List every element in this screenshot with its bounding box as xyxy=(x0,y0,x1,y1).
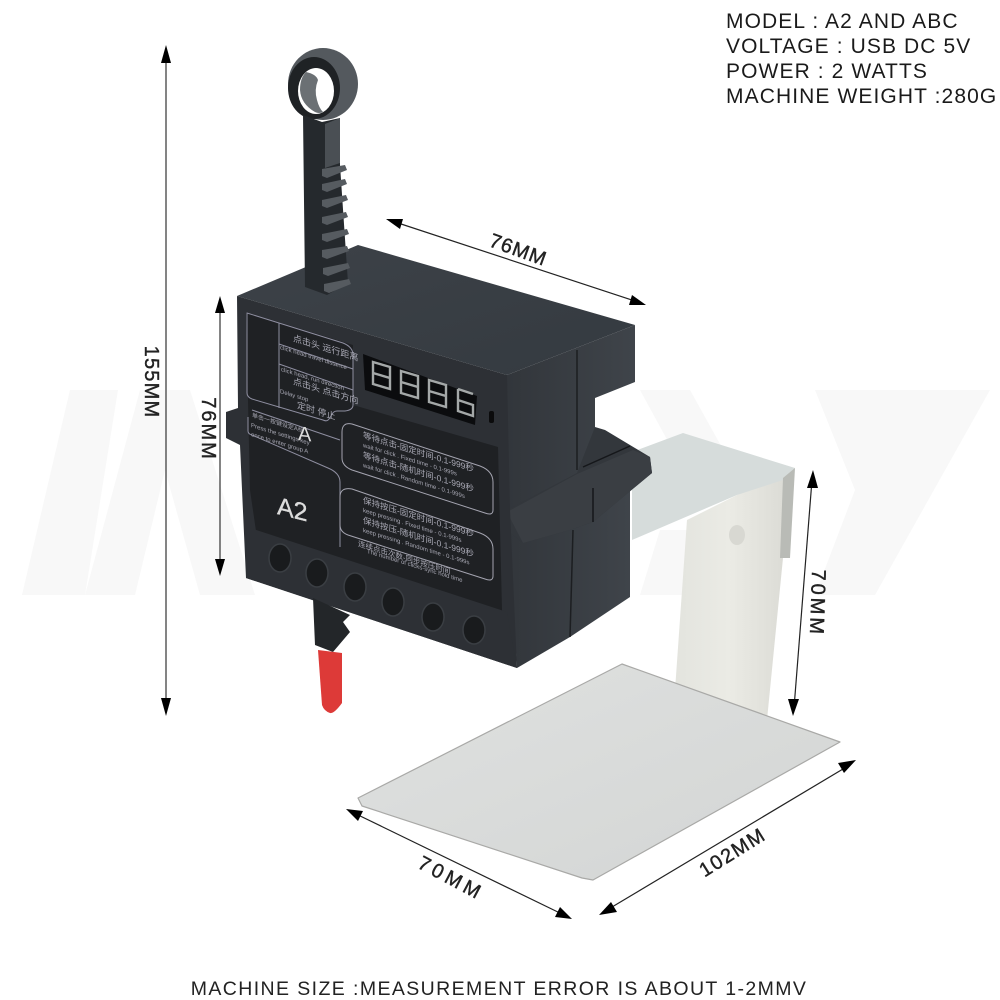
footer note: MACHINE SIZE :MEASUREMENT ERROR IS ABOUT 1-2MMV xyxy=(191,978,807,1000)
label: keep pressing panel: 保持按压-随机时间-0.1-999秒 xyxy=(363,514,474,559)
plunger: lower rack and red tip xyxy=(313,598,350,713)
label: letter A: A xyxy=(298,423,312,446)
device body: 定时 停止 xyxy=(297,399,335,422)
device body: 单击一按键设定A组 xyxy=(252,411,304,435)
dimension: upright height 70MM xyxy=(788,470,829,716)
device body: Press the settings key xyxy=(251,422,310,447)
device top face xyxy=(237,245,635,375)
dimension: width 76MM xyxy=(386,219,646,305)
device body: once to enter group A xyxy=(251,431,309,456)
label: wait for click panel: 等待点击-固定时间-0.1-999秒 xyxy=(363,429,474,474)
rod xyxy=(303,115,348,295)
device front face xyxy=(226,296,517,668)
dimension: front height 76MM xyxy=(197,296,225,576)
label: wait for click panel: wait for click . Random time - 0.1-999s xyxy=(362,462,465,500)
device side clamp xyxy=(507,427,652,543)
stand: bracket top and upright xyxy=(632,433,795,720)
device body: Delay stop xyxy=(280,388,309,404)
device body: click head travel distance xyxy=(280,344,347,372)
dimension: width 76MM: 76MM xyxy=(486,230,550,271)
device upper side face xyxy=(507,325,635,530)
label: wait for click panel: wait for click . Fixed time - 0.1-999s xyxy=(362,442,457,478)
plunger: rack rod with ring handle xyxy=(288,48,358,295)
display window xyxy=(363,354,494,425)
dimension: plate depth 70MM xyxy=(346,809,572,919)
device lower side face xyxy=(507,480,630,668)
specification text block: MACHINE WEIGHT :280G xyxy=(726,85,997,108)
device body: 点击头 点击方向 xyxy=(293,375,358,406)
label: keep pressing panel: 连续点击次数-同步按压时间 xyxy=(358,538,450,576)
label: wait for click panel xyxy=(342,424,493,514)
specification text block: VOLTAGE : USB DC 5V xyxy=(726,35,971,58)
label: keep pressing panel: keep pressing . Fixed time - 0.1-999s xyxy=(363,507,462,544)
device body: click head, run direction xyxy=(281,366,344,392)
rack teeth xyxy=(322,165,351,293)
specification text block: MODEL : A2 AND ABC xyxy=(726,10,959,33)
label: keep pressing panel xyxy=(340,489,493,584)
dimension: plate depth 70MM: 70MM xyxy=(414,852,488,905)
stand: base plate xyxy=(358,664,840,880)
device body xyxy=(226,245,652,668)
label: keep pressing panel: 保持按压-固定时间-0.1-999秒 xyxy=(363,494,474,539)
dimension: plate width 102MM xyxy=(599,760,856,915)
dimension: upright height 70MM: 70MM xyxy=(805,569,829,637)
dimension: front height 76MM: 76MM xyxy=(197,397,219,461)
background watermark logo xyxy=(22,390,990,595)
dimension: total height 155MM xyxy=(140,45,171,716)
label: keep pressing panel: keep pressing . Random time - 0.1-999s xyxy=(363,527,469,567)
label: upper instructions panel xyxy=(247,313,353,547)
button row xyxy=(246,527,517,668)
printed dark panel xyxy=(246,312,503,650)
specification text block xyxy=(726,10,997,108)
device body: 点击头 运行距离 xyxy=(293,332,358,363)
dimension: total height 155MM: 155MM xyxy=(140,346,162,418)
specification text block: POWER : 2 WATTS xyxy=(726,60,928,83)
label: wait for click panel: 等待点击-随机时间-0.1-999秒 xyxy=(363,449,474,494)
label: model name A2: A2 xyxy=(277,492,308,528)
ring handle xyxy=(288,48,358,120)
dimension: plate width 102MM: 102MM xyxy=(696,824,770,882)
label: keep pressing panel: The number of clicks-sync hold time xyxy=(367,548,463,584)
